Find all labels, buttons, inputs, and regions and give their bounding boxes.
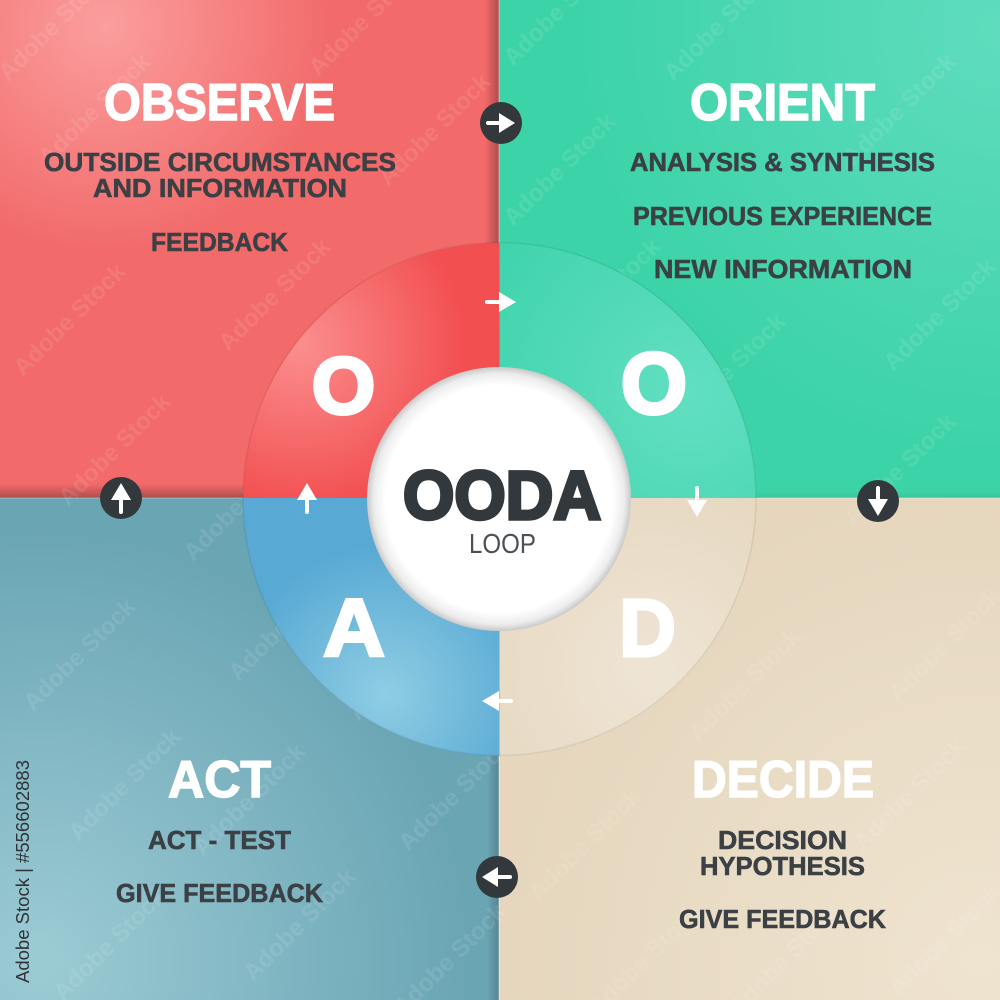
text: Adobe Stock — [838, 48, 962, 171]
text: Adobe Stock — [373, 68, 497, 191]
text: Adobe Stock — [343, 603, 467, 726]
text: Adobe Stock — [683, 623, 807, 746]
act text block — [116, 825, 323, 908]
text: Adobe Stock — [838, 408, 962, 531]
text: Adobe Stock — [238, 863, 362, 986]
letter O observe: O — [312, 341, 375, 430]
small arrow right — [485, 292, 516, 312]
orient text block: ANALYSIS & SYNTHESIS — [630, 147, 935, 177]
panel: act quadrant — [0, 498, 499, 1000]
ring segment: observe — [243, 243, 500, 498]
text: Adobe Stock — [213, 233, 337, 356]
orient text block: PREVIOUS EXPERIENCE — [633, 201, 932, 231]
panel: decide quadrant — [499, 498, 1000, 1000]
panel: orient quadrant — [499, 0, 1000, 498]
hub title OODA: OODA — [403, 457, 601, 534]
observe text block: AND INFORMATION — [93, 173, 347, 203]
text: Adobe Stock — [18, 593, 142, 716]
orient text block: NEW INFORMATION — [654, 254, 912, 284]
decide text block — [679, 825, 886, 934]
decide text block: HYPOTHESIS — [700, 851, 865, 881]
arrow badge: orient to decide — [857, 480, 899, 522]
center hub — [367, 367, 631, 631]
letter O orient: O — [621, 336, 687, 432]
text: Adobe Stock — [848, 733, 972, 856]
text: Adobe Stock — [33, 48, 157, 171]
letter D: D — [619, 583, 676, 674]
decide heading: DECIDE — [692, 751, 874, 809]
arrow badge: decide to act — [476, 856, 518, 898]
text: Adobe Stock — [178, 443, 302, 566]
text: Adobe Stock — [668, 308, 792, 431]
small arrow down — [687, 486, 707, 517]
text: Adobe Stock — [8, 258, 132, 381]
text: Adobe Stock — [878, 253, 1000, 376]
hub subtitle LOOP: LOOP — [469, 528, 536, 559]
text: Adobe Stock — [188, 738, 312, 861]
text: Adobe Stock — [498, 108, 622, 231]
text: Adobe Stock — [393, 733, 517, 856]
small arrow left — [482, 691, 513, 711]
letter A: A — [323, 583, 385, 674]
observe text block: OUTSIDE CIRCUMSTANCES — [44, 147, 396, 177]
observe text block — [44, 147, 396, 257]
text: Adobe Stock — [223, 563, 347, 686]
text: Adobe Stock — [543, 233, 667, 356]
act text block: GIVE FEEDBACK — [116, 878, 323, 908]
text: Adobe Stock — [333, 283, 457, 406]
ring segment: act — [243, 498, 500, 756]
arrow badge: observe to orient — [480, 102, 522, 144]
act text block: ACT - TEST — [148, 825, 291, 855]
small arrow up — [297, 483, 317, 514]
decide text block: GIVE FEEDBACK — [679, 904, 886, 934]
text: Adobe Stock — [523, 783, 647, 906]
ring segment: orient — [500, 243, 756, 498]
ring segment: decide — [500, 498, 756, 756]
observe heading: OBSERVE — [104, 74, 335, 132]
text: Adobe Stock — [53, 388, 177, 511]
text: Adobe Stock — [63, 723, 187, 846]
panel: observe quadrant — [0, 0, 499, 498]
orient heading: ORIENT — [690, 74, 875, 132]
orient text block — [630, 147, 935, 284]
act heading: ACT — [168, 751, 271, 809]
watermark id: Adobe Stock | #556602883 — [13, 760, 33, 983]
decide text block: DECISION — [718, 825, 847, 855]
arrow badge: act to observe — [100, 477, 142, 519]
ring chart: OODA segments — [243, 242, 756, 756]
text: Adobe Stock — [553, 573, 677, 696]
observe text block: FEEDBACK — [151, 227, 288, 257]
